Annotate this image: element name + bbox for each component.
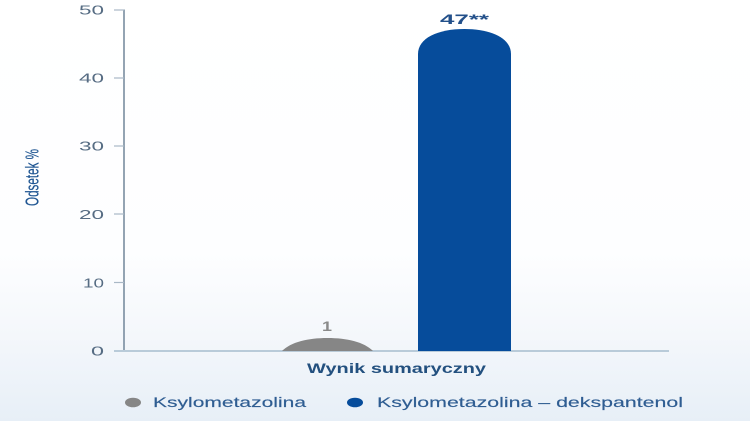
value label: 1: 1 [322,318,332,334]
bar: Ksylometazolina – dekspantenol [418,29,511,351]
legend [125,394,683,410]
legend item: Ksylometazolina: Ksylometazolina [153,394,306,410]
y axis tick labels [79,4,104,358]
x axis baseline [114,350,669,352]
y axis tick labels: 50 [79,4,104,18]
y axis [114,10,124,351]
y axis tick labels: 40 [79,72,104,86]
y axis tick labels: 30 [79,140,104,154]
y axis title: Odsetek % [22,149,42,206]
legend item: Ksylometazolina – dekspantenol: Ksylometazolina – dekspantenol [377,394,683,410]
y axis tick labels: 20 [79,208,104,222]
y axis tick labels: 10 [83,276,104,290]
legend item: Ksylometazolina – dekspantenol [347,394,683,410]
bar: Ksylometazolina [282,338,373,351]
x axis category label: Wynik sumaryczny [307,360,486,376]
y axis tick labels: 0 [91,344,104,358]
legend item: Ksylometazolina [125,394,306,410]
value label: 47**: 47** [440,11,490,27]
